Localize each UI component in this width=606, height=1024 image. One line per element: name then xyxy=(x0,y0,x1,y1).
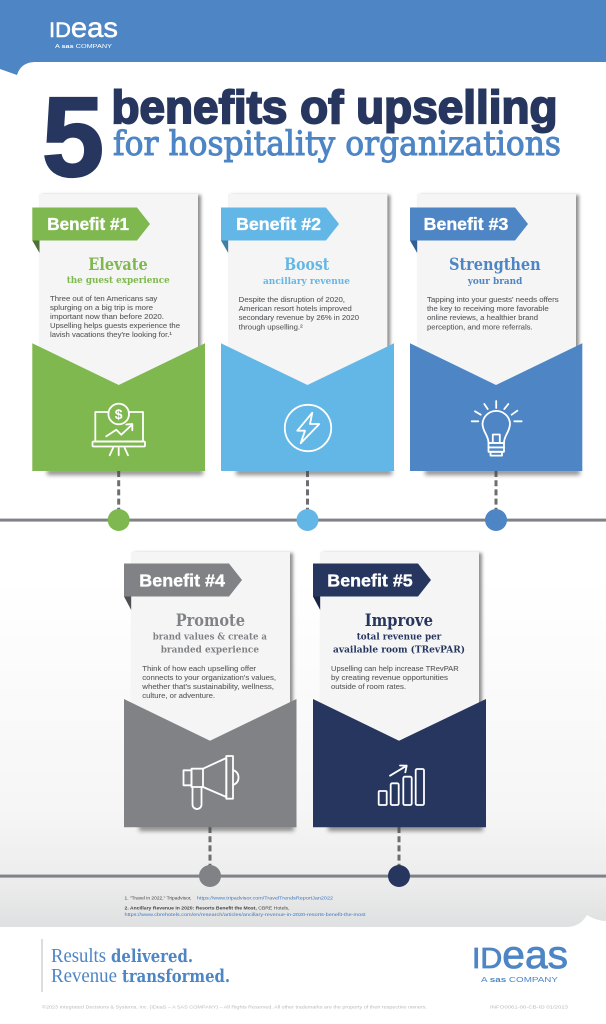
body text xyxy=(239,295,359,331)
body text: Despite the disruption of 2020, xyxy=(239,295,345,304)
timeline dot xyxy=(108,509,130,531)
footnotes: https://www.tripadvisor.com/TravelTrendsReportJan2022 xyxy=(197,896,333,902)
body text xyxy=(141,664,276,700)
color block xyxy=(410,343,582,471)
timeline dot xyxy=(199,865,221,887)
body text: outside of room rates. xyxy=(331,682,406,691)
body text: Three out of ten Americans say xyxy=(50,294,158,303)
connector xyxy=(398,827,400,868)
ribbon xyxy=(124,564,242,610)
footnotes xyxy=(124,896,366,918)
document code: INFO0061-00-CB-ID 01/2023 xyxy=(490,1004,568,1010)
icon: rising bar chart xyxy=(379,766,424,805)
card paper xyxy=(39,194,198,386)
body text: by creating revenue opportunities xyxy=(331,673,448,682)
title xyxy=(42,74,561,200)
ribbon: Benefit #2 xyxy=(236,214,321,234)
subheading: ancillary revenue xyxy=(263,276,350,287)
ribbon: Benefit #1 xyxy=(47,214,129,234)
header logo: IDeas xyxy=(49,12,118,43)
icon: light bulb xyxy=(472,401,522,456)
body text: splurging on a big trip is more xyxy=(50,303,153,312)
big numeral 5: 5 xyxy=(42,74,104,200)
footer logo: A sas COMPANY xyxy=(481,975,558,984)
footnotes: 2. Ancillary Revenue in 2020: Resorts Benefit the Most, CBRE Hotels, xyxy=(124,905,290,911)
ribbon: Benefit #4 xyxy=(139,571,225,591)
tagline xyxy=(41,939,230,992)
tagline: Revenue xyxy=(51,965,117,987)
body text: the key to receiving more favorable xyxy=(427,304,549,313)
subheading: available room (TRevPAR) xyxy=(333,644,465,655)
body text: important now than before 2020. xyxy=(50,312,164,321)
panel: benefit 1 xyxy=(32,194,205,531)
card paper xyxy=(320,552,479,742)
ribbon: Benefit #5 xyxy=(327,571,413,591)
connector xyxy=(117,471,120,512)
heading: Improve xyxy=(365,611,433,630)
timeline dot xyxy=(388,865,410,887)
subheading: the guest experience xyxy=(67,275,170,286)
body text: American resort hotels improved xyxy=(239,304,352,313)
body text: whether that's sustainability, wellness, xyxy=(141,682,274,691)
heading: Boost xyxy=(284,255,330,274)
color block xyxy=(124,699,296,827)
card paper xyxy=(417,194,576,386)
icon: lightning bolt in circle xyxy=(285,405,331,451)
subheading: brand values & create a xyxy=(153,632,267,643)
body text: Tapping into your guests' needs offers xyxy=(427,295,559,304)
card paper xyxy=(228,194,387,386)
body text: lavish vacations they're looking for.¹ xyxy=(50,330,173,339)
body text: through upselling.² xyxy=(239,322,303,331)
ribbon: Benefit #3 xyxy=(424,214,509,234)
footer logo: IDeas xyxy=(472,934,568,977)
card shadow xyxy=(328,825,483,831)
panel: benefit 5 xyxy=(313,552,486,887)
connector xyxy=(306,471,309,512)
body text: perception, and more referrals. xyxy=(427,322,533,331)
card shadow xyxy=(47,469,203,475)
header logo: A sas COMPANY xyxy=(55,44,112,50)
panel: benefit 2 xyxy=(221,194,394,531)
icon: presentation board with dollar coin xyxy=(92,404,145,455)
title line two: for hospitality organizations xyxy=(113,124,561,164)
heading: Elevate xyxy=(88,255,148,274)
tagline: Results xyxy=(51,945,106,967)
subheading xyxy=(333,632,465,655)
body text xyxy=(50,294,180,339)
body text: online reviews, a healthier brand xyxy=(427,313,538,322)
title line one: benefits of upselling xyxy=(112,81,558,133)
connector xyxy=(494,471,498,512)
body text xyxy=(331,664,459,691)
tagline: delivered. xyxy=(111,946,193,967)
card shadow xyxy=(425,469,580,475)
connector xyxy=(208,827,212,868)
color block xyxy=(32,343,205,471)
footnotes: https://www.cbrehotels.com/en/research/articles/ancillary-revenue-in-2020-resorts-benefit-the-most xyxy=(124,912,366,918)
panel: benefit 3 xyxy=(410,194,582,531)
copyright: ©2023 Integrated Decisions & Systems, Inc. (IDeaS – A SAS COMPANY) – All Rights Reserved. All other trademarks are the property of their respective owners. xyxy=(42,1004,427,1010)
body text: Think of how each upselling offer xyxy=(142,664,257,673)
timeline two xyxy=(0,875,606,878)
subheading xyxy=(153,632,267,655)
subheading: branded experience xyxy=(161,644,259,655)
heading: Strengthen xyxy=(449,255,541,274)
card paper xyxy=(131,552,290,742)
ribbon xyxy=(313,564,431,610)
body text: secondary revenue by 26% in 2020 xyxy=(239,313,359,322)
timeline dot xyxy=(485,509,507,531)
icon: presentation board with dollar coin: $ xyxy=(115,406,123,422)
ribbon xyxy=(32,208,150,253)
body text: Upselling helps guests experience the xyxy=(50,321,180,330)
body text: Upselling can help increase TRevPAR xyxy=(331,664,459,673)
panel: benefit 4 xyxy=(124,552,296,887)
footnotes: 1. "Travel in 2022," Tripadvisor, xyxy=(124,896,192,902)
header band xyxy=(0,0,606,75)
subheading: your brand xyxy=(467,276,523,287)
icon: megaphone xyxy=(184,756,238,809)
body text xyxy=(427,295,559,331)
card shadow xyxy=(236,469,392,475)
ribbon xyxy=(410,208,528,253)
ribbon xyxy=(221,208,339,253)
subheading: total revenue per xyxy=(357,632,442,643)
card shadow xyxy=(139,825,294,831)
timeline one xyxy=(0,519,606,522)
body text: culture, or adventure. xyxy=(142,691,215,700)
timeline dot xyxy=(296,509,318,531)
color block xyxy=(313,699,486,827)
heading: Promote xyxy=(176,611,245,630)
color block xyxy=(221,343,394,471)
footer panel xyxy=(0,915,606,1024)
body text: connects to your organization's values, xyxy=(142,673,276,682)
tagline: transformed. xyxy=(122,966,230,987)
